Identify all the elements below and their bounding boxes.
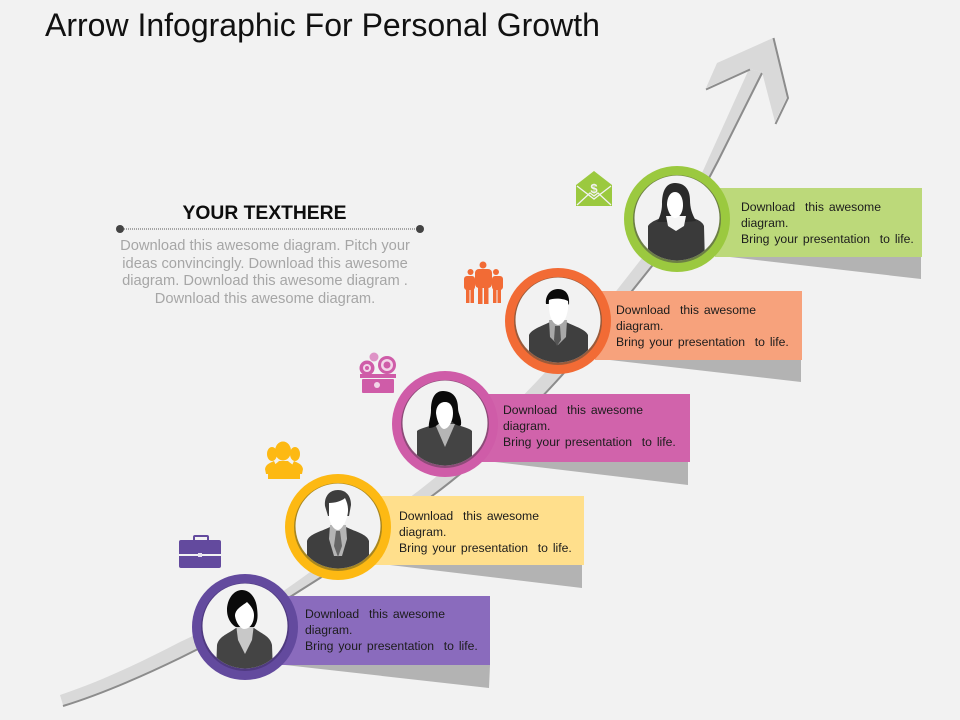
label box — [480, 394, 690, 462]
text — [399, 509, 572, 555]
panel: step 5 green — [624, 166, 922, 279]
text: Download this awesome — [305, 607, 445, 621]
growth arrow — [60, 38, 788, 706]
label box — [595, 291, 802, 360]
label box — [715, 188, 922, 257]
stem shadow edge — [63, 73, 762, 706]
body text — [120, 238, 410, 307]
text block: your text here — [116, 203, 424, 307]
dotted divider with end dots — [116, 225, 424, 233]
arrow head — [706, 38, 787, 122]
text: Download this awesome — [616, 303, 756, 317]
icon: money envelope — [576, 171, 612, 206]
portrait: woman with long hair — [401, 380, 489, 470]
shadow — [730, 257, 921, 279]
portrait: woman with long straight hair — [633, 175, 721, 264]
text: diagram. — [616, 319, 663, 333]
shadow — [285, 665, 490, 688]
portrait: man with short dark hair — [514, 277, 602, 366]
ring — [505, 268, 611, 374]
ring — [392, 371, 498, 477]
panel: step 1 purple — [192, 574, 490, 688]
title: Arrow Infographic For Personal Growth — [45, 7, 600, 43]
text: diagram. — [503, 419, 550, 433]
label box — [375, 496, 584, 565]
body text: Download this awesome diagram. — [155, 291, 375, 307]
icon: gears and box — [360, 352, 396, 393]
text: Download this awesome — [741, 200, 881, 214]
ring — [192, 574, 298, 680]
text — [616, 303, 789, 349]
icon: briefcase — [179, 535, 221, 568]
text — [503, 403, 676, 449]
label box — [280, 596, 490, 665]
text: Download this awesome — [399, 509, 539, 523]
ring — [285, 474, 391, 580]
portrait: man with tie — [294, 483, 382, 572]
icon: group of three yellow — [265, 442, 303, 479]
text: diagram. — [399, 525, 446, 539]
text: diagram. — [741, 216, 788, 230]
shadow — [495, 462, 688, 485]
text — [305, 607, 478, 653]
heading: YOUR TEXTHERE — [183, 203, 347, 224]
shadow — [610, 360, 801, 382]
text — [741, 200, 914, 246]
shadow — [390, 565, 582, 588]
arrow stem — [60, 69, 762, 705]
panel: step 3 pink — [392, 371, 690, 485]
text: diagram. — [305, 623, 352, 637]
text: Bring your presentation to life. — [503, 435, 676, 449]
panel: step 4 orange — [505, 268, 802, 382]
icon: three standing people — [464, 262, 503, 304]
head shadow edges — [706, 38, 788, 124]
text: Bring your presentation to life. — [616, 335, 789, 349]
text: Bring your presentation to life. — [305, 639, 478, 653]
body text: diagram. Download this awesome diagram . — [122, 273, 408, 289]
text: Bring your presentation to life. — [399, 541, 572, 555]
portrait: woman with short hair — [201, 583, 289, 672]
text: Download this awesome — [503, 403, 643, 417]
ring — [624, 166, 730, 272]
panel: step 2 yellow — [285, 474, 584, 588]
text: Bring your presentation to life. — [741, 232, 914, 246]
body text: ideas convincingly. Download this awesome — [122, 256, 408, 272]
icon: money envelope: $ — [590, 181, 598, 196]
body text: Download this awesome diagram. Pitch your — [120, 238, 410, 254]
